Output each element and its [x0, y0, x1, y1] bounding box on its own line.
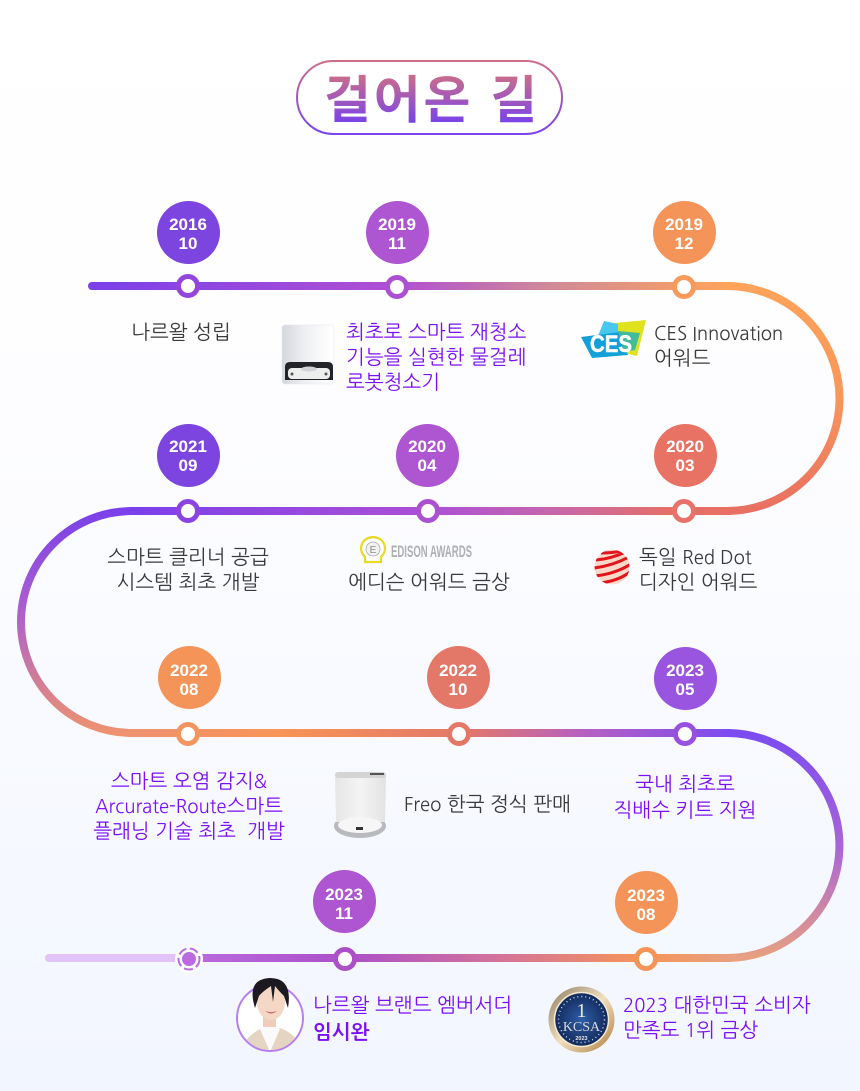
- date badges: 09: [179, 456, 197, 475]
- icon: Freo robot: [334, 772, 386, 838]
- date badges: 2019: [378, 215, 416, 234]
- title pill: [297, 59, 562, 134]
- date badges: 2016: [169, 215, 207, 234]
- date badges: 2019: [665, 215, 703, 234]
- icon: KCSA medal: 2023: [575, 1036, 588, 1042]
- text: Freo launch: Freo 한국 정식 판매: [404, 794, 571, 814]
- date badges: 11: [388, 234, 406, 253]
- date badges: 2022: [170, 661, 208, 680]
- text: water kit: 국내 최초로: [635, 774, 735, 794]
- date badges: 2023: [325, 885, 363, 904]
- icon: Edison Awards logo: [361, 537, 472, 562]
- text: Red Dot award: 독일 Red Dot: [639, 547, 752, 567]
- title: 걸어온 길: [324, 59, 540, 133]
- icon: CES logo: CES: [590, 331, 632, 358]
- timeline nodes: [178, 276, 694, 968]
- text logo: EDISON AWARDS: [391, 542, 472, 561]
- date badges: 11: [335, 904, 353, 923]
- date badges: 08: [637, 905, 655, 924]
- text: supply system: [107, 547, 269, 592]
- icon: robot station white: [282, 325, 334, 384]
- icon: Red Dot ball: [594, 550, 630, 584]
- date badges: 08: [180, 680, 198, 699]
- text: ambassador: 나르왈 브랜드 엠버서더: [313, 995, 512, 1015]
- date badges: 12: [675, 234, 693, 253]
- text: Red Dot award: [639, 547, 757, 592]
- text: stain detection: 스마트 오염 감지&: [111, 771, 267, 791]
- text: first smart mop robot: 로봇청소기: [346, 372, 440, 392]
- text: ambassador: 임시완: [313, 1022, 369, 1042]
- text: CES award: [654, 324, 783, 368]
- date badges: 2022: [439, 661, 477, 680]
- text: first smart mop robot: 기능을 실현한 물걸레: [346, 347, 526, 367]
- icon: Edison Awards logo: E: [370, 545, 377, 556]
- date badges: [157, 201, 717, 934]
- icon: KCSA medal: [548, 986, 614, 1052]
- text: Edison award: 에디슨 어워드 금상: [348, 572, 510, 592]
- text: Red Dot award: 디자인 어워드: [639, 572, 757, 592]
- date badges: 2023: [666, 661, 704, 680]
- text: supply system: 스마트 클리너 공급: [107, 547, 269, 567]
- text: supply system: 시스템 최초 개발: [117, 572, 259, 592]
- text: KCSA award: [623, 995, 811, 1040]
- date badges: 10: [449, 680, 467, 699]
- current position node: [175, 945, 203, 973]
- date badges: 04: [418, 456, 437, 475]
- text: stain detection: Arcurate-Route스마트: [95, 796, 283, 816]
- date badges: 2023: [627, 886, 665, 905]
- text: stain detection: [93, 771, 285, 841]
- date badges: 10: [179, 234, 197, 253]
- text: water kit: [614, 774, 756, 820]
- text: founding: 나르왈 성립: [131, 322, 231, 342]
- text: CES award: 어워드: [654, 348, 710, 368]
- icon: KCSA medal: KCSA: [563, 1020, 601, 1035]
- text: first smart mop robot: 최초로 스마트 재청소: [346, 322, 526, 342]
- text: KCSA award: 만족도 1위 금상: [623, 1020, 758, 1040]
- date badges: 2020: [408, 437, 446, 456]
- text: CES award: CES Innovation: [654, 324, 783, 343]
- timeline path: [21, 286, 840, 958]
- icon: KCSA medal: 1: [576, 1000, 586, 1022]
- icon: CES logo: [581, 320, 646, 358]
- text: ambassador: [313, 995, 512, 1042]
- date badges: 2021: [169, 437, 207, 456]
- text: first smart mop robot: [346, 322, 526, 392]
- text: water kit: 직배수 키트 지원: [614, 800, 756, 820]
- icon: ambassador portrait: [237, 978, 304, 1052]
- date badges: 05: [676, 680, 694, 699]
- text: stain detection: 플래닝 기술 최초 개발: [93, 821, 285, 841]
- text: KCSA award: 2023 대한민국 소비자: [623, 995, 811, 1015]
- date badges: 2020: [666, 437, 704, 456]
- date badges: 03: [676, 456, 694, 475]
